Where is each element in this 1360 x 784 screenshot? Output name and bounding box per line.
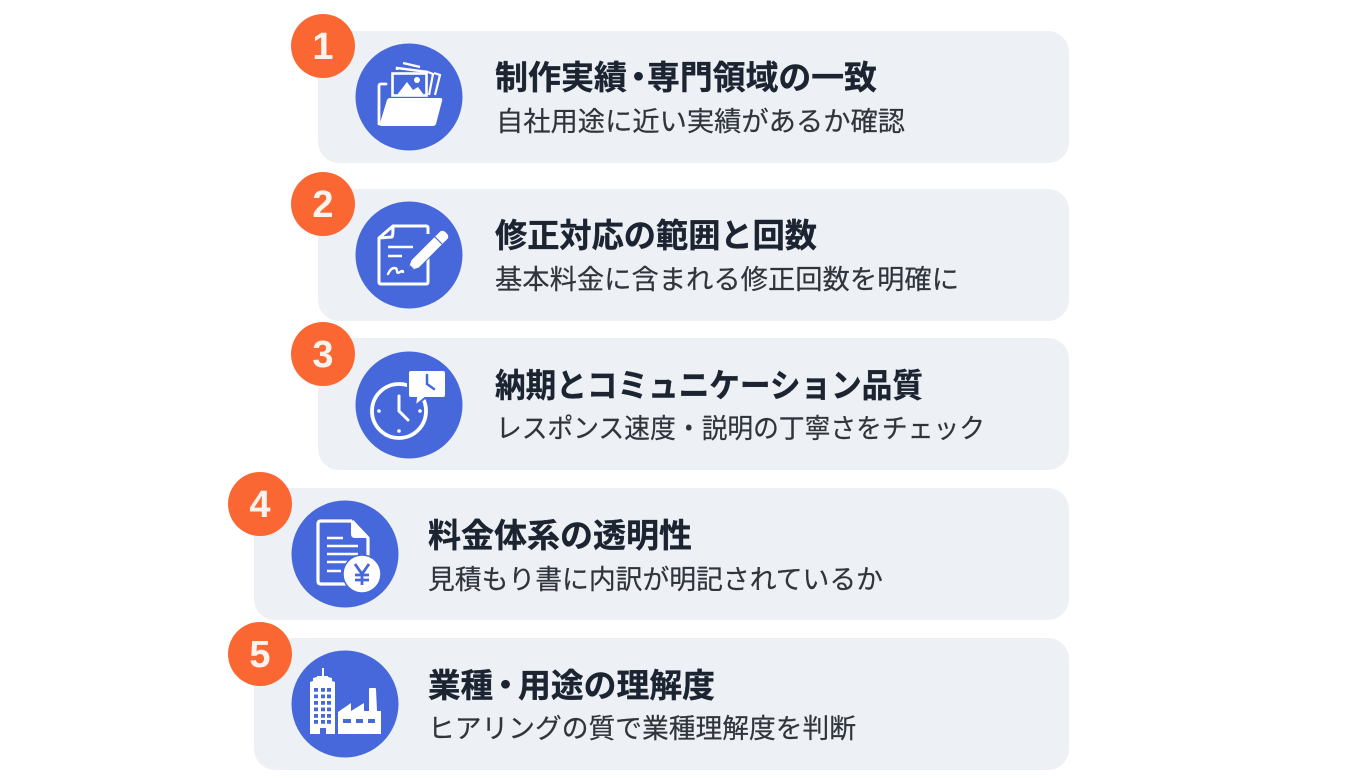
heading 2: 修正対応の範囲と回数 <box>495 209 817 257</box>
heading 3: 納期とコミュニケーション品質 <box>495 359 923 407</box>
badge: number 1 <box>291 14 355 78</box>
item 3 <box>291 322 1069 470</box>
badge: number 3 <box>291 322 355 386</box>
item 4 <box>228 472 1069 620</box>
badge: number 2 <box>291 172 355 236</box>
icon: document with pencil <box>356 202 462 308</box>
heading 1: ・ <box>622 51 655 99</box>
icon: folder with photos <box>356 44 462 150</box>
item 1 <box>291 14 1069 163</box>
panel: card 3 <box>318 338 1069 470</box>
text 5: ヒアリングの質で業種理解度を判断 <box>428 707 856 746</box>
heading 1: 専門領域の一致 <box>647 51 877 99</box>
text 1: 自社用途に近い実績があるか確認 <box>496 100 905 139</box>
item 5 <box>228 622 1069 770</box>
badge: number 5 <box>228 622 292 686</box>
panel: card 1 <box>318 31 1069 163</box>
badge: number 1: 1 <box>312 26 334 68</box>
text 4: 見積もり書に内訳が明記されているか <box>428 558 883 597</box>
panel: card 4 <box>254 488 1069 620</box>
item 2 <box>291 172 1069 321</box>
badge: number 2: 2 <box>312 184 334 226</box>
icon: invoice with yen coin <box>292 500 398 608</box>
heading 5: 業種 <box>428 659 493 707</box>
icon: office building and factory <box>292 650 398 758</box>
heading 1: 制作実績 <box>495 51 627 99</box>
heading 5: ・ <box>489 659 522 707</box>
panel: card 2 <box>318 189 1069 321</box>
badge: number 5: 5 <box>249 634 271 676</box>
badge: number 4 <box>228 472 292 536</box>
panel: card 5 <box>254 638 1069 770</box>
heading 4: 料金体系の透明性 <box>428 509 692 557</box>
icon: clock and speech bubble <box>356 352 462 458</box>
badge: number 4: 4 <box>249 484 271 526</box>
heading 5: 用途の理解度 <box>518 659 715 707</box>
text 3: レスポンス速度・説明の丁寧さをチェック <box>496 407 985 446</box>
badge: number 3: 3 <box>312 334 334 376</box>
text 2: 基本料金に含まれる修正回数を明確に <box>495 258 959 297</box>
